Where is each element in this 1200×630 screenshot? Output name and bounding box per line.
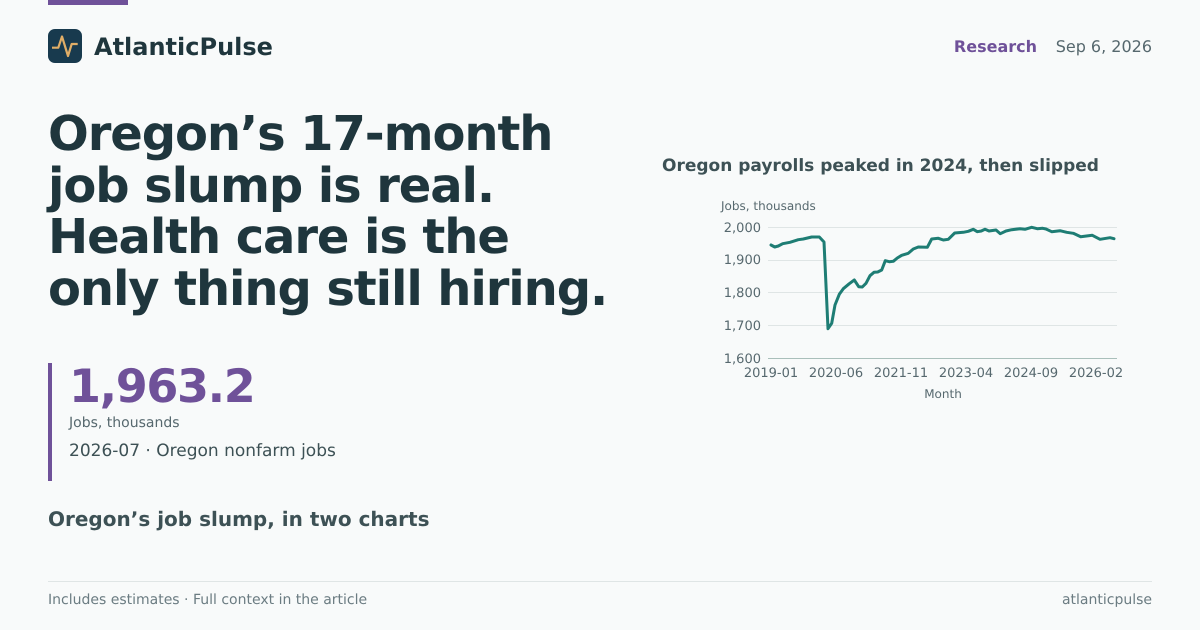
x axis labels: 2024-09	[1004, 366, 1058, 381]
accent bar	[48, 0, 128, 5]
footer source: atlanticpulse	[1062, 592, 1152, 608]
stat accent rule	[48, 363, 52, 481]
y axis labels: 2,000	[724, 221, 761, 236]
footer note: Includes estimates · Full context in the article	[48, 592, 367, 608]
title: Health care is the	[48, 209, 509, 265]
section label: Research	[954, 37, 1037, 56]
y axis labels: 1,600	[724, 352, 761, 367]
footer rule	[48, 581, 1152, 582]
y axis labels	[724, 221, 761, 367]
y axis labels: 1,900	[724, 253, 761, 268]
y axis title: Jobs, thousands	[720, 199, 816, 213]
title: only thing still hiring.	[48, 261, 607, 317]
icon: pulse logo	[48, 29, 82, 63]
data line	[771, 227, 1114, 329]
x axis labels: 2021-11	[874, 366, 928, 381]
line chart: Oregon payrolls	[720, 199, 1123, 401]
x axis labels: 2023-04	[939, 366, 993, 381]
y axis labels: 1,800	[724, 286, 761, 301]
stat unit: Jobs, thousands	[69, 415, 180, 431]
y axis labels: 1,700	[724, 319, 761, 334]
x axis labels: 2019-01	[744, 366, 798, 381]
x axis labels: 2020-06	[809, 366, 863, 381]
chart title: Oregon payrolls peaked in 2024, then slipped	[662, 156, 1099, 176]
key stat callout	[48, 359, 336, 481]
title: Oregon’s 17-month	[48, 106, 552, 162]
stat value: 1,963.2	[69, 359, 254, 413]
brand name: AtlanticPulse	[94, 33, 273, 61]
title: job slump is real.	[48, 158, 494, 214]
section subheading: Oregon’s job slump, in two charts	[48, 507, 430, 531]
x axis labels: 2026-02	[1069, 366, 1123, 381]
stat description: 2026-07 · Oregon nonfarm jobs	[69, 441, 336, 461]
title	[46, 106, 607, 317]
x axis title: Month	[924, 387, 962, 401]
date: Sep 6, 2026	[1056, 37, 1152, 56]
x axis labels	[744, 366, 1123, 381]
